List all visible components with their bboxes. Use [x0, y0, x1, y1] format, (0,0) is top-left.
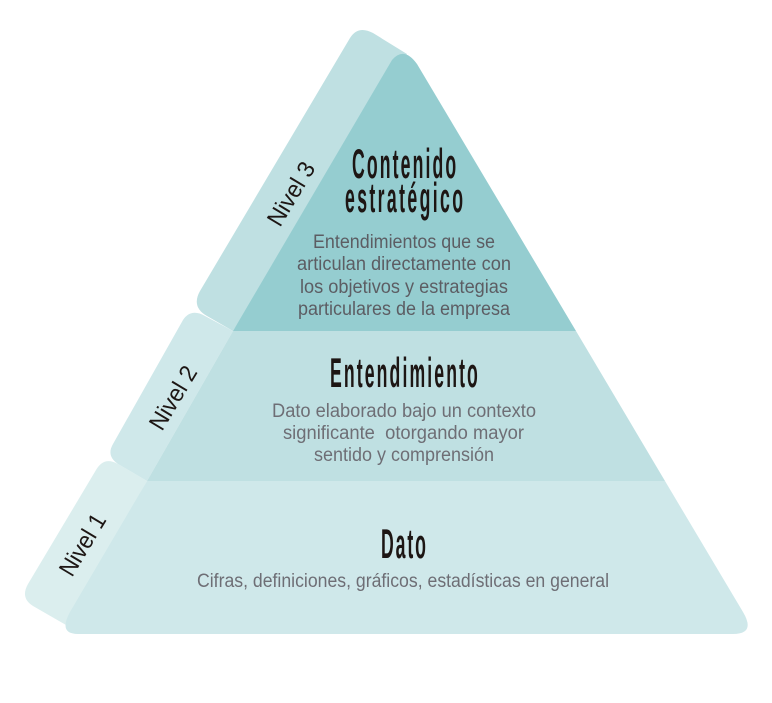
description: Contenido estratégico: particulares de la empresa [298, 299, 510, 320]
description: Contenido estratégico: Entendimientos que se [313, 232, 495, 253]
description: Entendimiento [272, 401, 536, 466]
side tab: Nivel 2 [110, 313, 233, 481]
label: Nivel 3: Nivel 3 [262, 157, 321, 231]
description: Contenido estratégico: los objetivos y estrategias [300, 277, 508, 298]
description: Entendimiento: Dato elaborado bajo un contexto [272, 401, 536, 422]
side tab: Nivel 3 [197, 30, 407, 331]
description: Contenido estratégico: articulan directamente con [297, 254, 511, 275]
description: Entendimiento: significante otorgando mayor [283, 423, 525, 444]
level 1 block: Dato [66, 481, 748, 634]
heading: Contenido estratégico: estratégico [345, 174, 463, 221]
heading: Entendimiento: Entendimiento [330, 349, 478, 396]
heading: Dato: Dato [381, 520, 426, 567]
heading: Contenido estratégico: Contenido [352, 140, 456, 187]
description: Dato: Cifras, definiciones, gráficos, estadísticas en general [197, 571, 609, 592]
label: Nivel 1: Nivel 1 [54, 509, 112, 581]
heading: Contenido estratégico [345, 140, 463, 221]
description: Entendimiento: sentido y comprensión [314, 445, 494, 466]
level 2 block: Entendimiento [147, 331, 665, 481]
level 3 block: Contenido estratégico [233, 54, 576, 331]
side tab: Nivel 1 [25, 461, 147, 625]
description: Contenido estratégico [297, 232, 511, 320]
label: Nivel 2: Nivel 2 [144, 361, 203, 435]
